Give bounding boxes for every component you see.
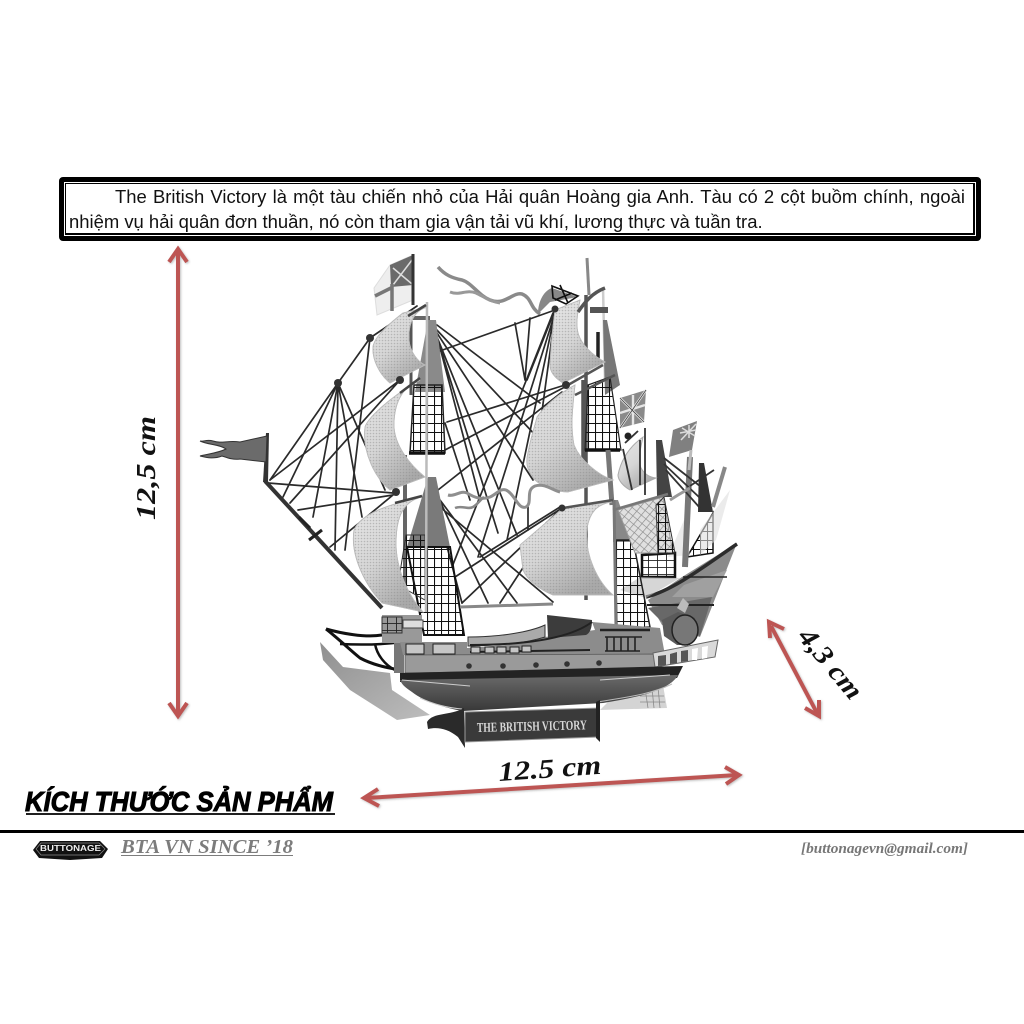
white ensign flag <box>374 254 413 315</box>
rear ensign flag <box>669 421 697 470</box>
sail: fore middle <box>365 380 425 490</box>
width arrow <box>364 767 739 806</box>
ship model <box>200 254 737 748</box>
sail: fore lower <box>353 497 423 612</box>
bow castle <box>382 615 423 673</box>
beak rails <box>326 629 402 670</box>
sail: fore top <box>373 307 428 383</box>
mid streamer <box>448 485 560 508</box>
small aft sail <box>618 428 656 495</box>
union flag <box>620 390 646 428</box>
depth label: 4,3 cm <box>792 621 869 705</box>
description line 1: The British Victory là một tàu chiến nhỏ của Hải quân Hoàng gia Anh. Tàu có 2 cột buồm chính, ngoài <box>115 186 965 207</box>
footer logo: BUTTONAGE <box>40 843 101 853</box>
quarterdeck balustrade <box>605 637 642 651</box>
upper hull and decks <box>400 615 665 655</box>
spar joints <box>334 306 632 512</box>
depth arrow <box>769 622 819 716</box>
section title: KÍCH THƯỚC SẢN PHẨM <box>25 785 334 817</box>
fore sails <box>353 305 428 612</box>
width label: 12.5 cm <box>497 750 602 787</box>
description line 2: nhiệm vụ hải quân đơn thuần, nó còn tham gia vận tải vũ khí, lương thực và tuần tra. <box>69 211 763 232</box>
boom between masts <box>460 604 553 607</box>
footer email: [buttonagevn@gmail.com] <box>801 841 968 857</box>
net sail <box>613 494 675 553</box>
height label: 12,5 cm <box>131 416 161 520</box>
footer rule <box>0 830 1024 833</box>
sail: main lower <box>520 502 613 595</box>
display stand <box>427 700 600 748</box>
stern plate <box>646 543 737 637</box>
top streamer <box>438 267 578 314</box>
gun band <box>405 654 660 673</box>
lower hull <box>400 666 683 711</box>
rigging lines <box>268 306 565 603</box>
stern fin plate <box>320 642 667 720</box>
bow pennant <box>200 433 269 482</box>
rear gallery <box>653 640 718 667</box>
fore mast <box>398 302 464 635</box>
gun ports <box>466 660 602 669</box>
sail: main top <box>550 300 605 383</box>
main mast <box>583 258 650 628</box>
barrel stern turret <box>662 598 698 645</box>
description text box <box>59 177 981 241</box>
stand nameplate: THE BRITISH VICTORY <box>477 717 587 735</box>
bowsprit spar <box>265 481 382 608</box>
main sails <box>520 288 615 595</box>
waist cabin <box>547 615 592 638</box>
sail: main middle <box>527 385 613 492</box>
height arrow <box>169 249 187 716</box>
deck windows <box>406 644 531 654</box>
footer brand: BTA VN SINCE ’18 <box>120 836 293 858</box>
rear masts and rigging <box>620 440 730 598</box>
footer logo <box>33 841 108 860</box>
